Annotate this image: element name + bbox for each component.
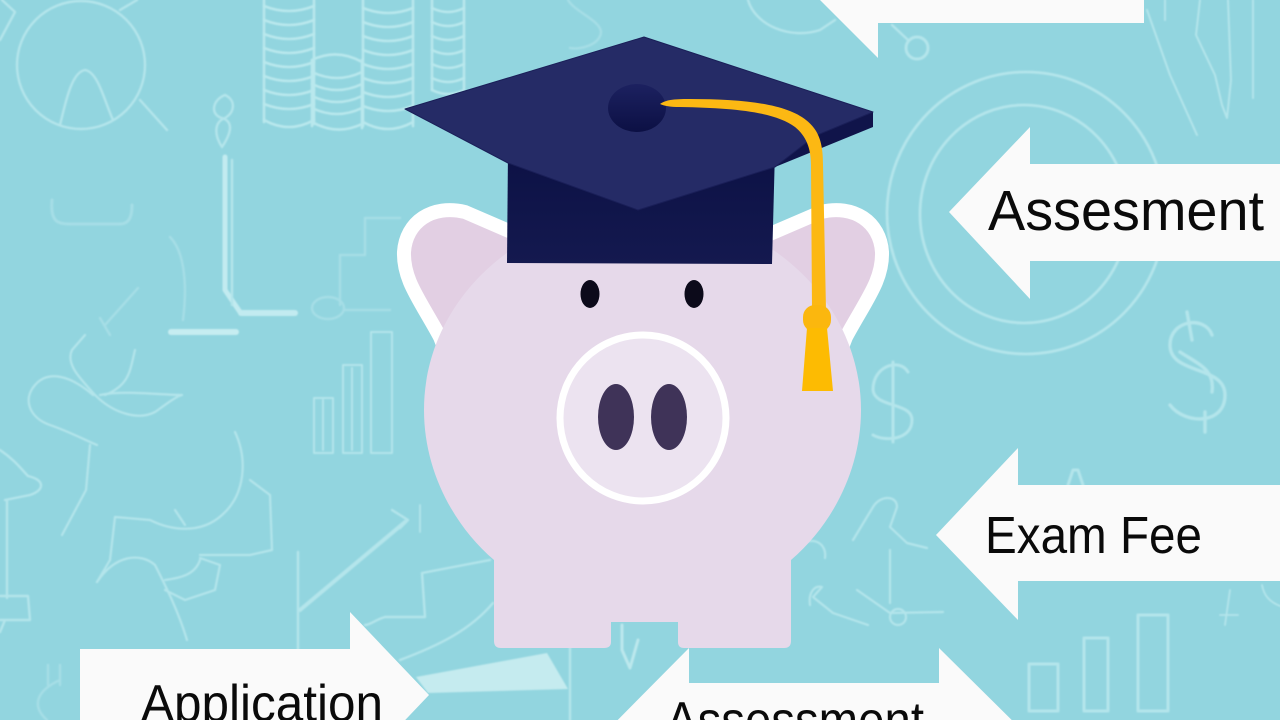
- pig body: [424, 210, 861, 648]
- doodle: tick under legs: [622, 625, 638, 668]
- snout: [560, 335, 726, 501]
- doodle: bar chart right: [1029, 615, 1168, 711]
- doodle: target circles: [887, 72, 1165, 354]
- doodle: bow sketch: [29, 335, 272, 640]
- doodle: light parallelogram: [416, 653, 568, 693]
- arrow: top (partially cropped): [820, 0, 1144, 58]
- doodle: gauge circle: [0, 0, 167, 130]
- doodle: stairs and rising curve: [365, 560, 570, 720]
- label: Assesment: Assesment: [988, 179, 1264, 243]
- label: Exam Fee: Exam Fee: [985, 507, 1202, 565]
- doodle: growth arrow: [298, 505, 420, 650]
- doodle: top right sketch: [1147, 0, 1253, 135]
- tassel knot: [803, 305, 831, 332]
- piggy bank: [404, 210, 882, 648]
- nostril right: [651, 384, 687, 450]
- doodle: dollar sign and axis: [171, 95, 295, 332]
- tassel cord: [660, 99, 826, 310]
- doodle: faint outlines: [52, 200, 400, 335]
- doodle: top arc and key: [568, 0, 928, 59]
- left ear: [404, 210, 530, 368]
- arrow: Assesment: [949, 127, 1280, 299]
- doodle: dollar right: [1170, 312, 1225, 432]
- eye right: [684, 280, 704, 308]
- arrow: Application: [80, 612, 429, 720]
- doodle: lower right marks: [1220, 585, 1280, 625]
- doodle: left edge cloud: [0, 450, 60, 720]
- tassel fringe: [802, 328, 833, 391]
- board: [405, 37, 873, 210]
- arrow: Assessment (double-headed, cropped): [590, 648, 1040, 720]
- board edge: [740, 112, 873, 167]
- doodle: bump above exam fee arrow: [1068, 470, 1083, 485]
- nostril left: [598, 384, 634, 450]
- arrow: Exam Fee: [936, 448, 1280, 620]
- cap button: [608, 84, 666, 132]
- eye left: [580, 280, 600, 308]
- doodle: dollar left: [873, 362, 912, 442]
- doodle: bar chart left: [314, 332, 392, 453]
- doodle: coin stacks: [264, 0, 464, 130]
- graduation cap: [405, 37, 873, 391]
- doodle: figures right of pig: [800, 498, 943, 625]
- cap base: [507, 150, 775, 264]
- right ear: [756, 210, 882, 368]
